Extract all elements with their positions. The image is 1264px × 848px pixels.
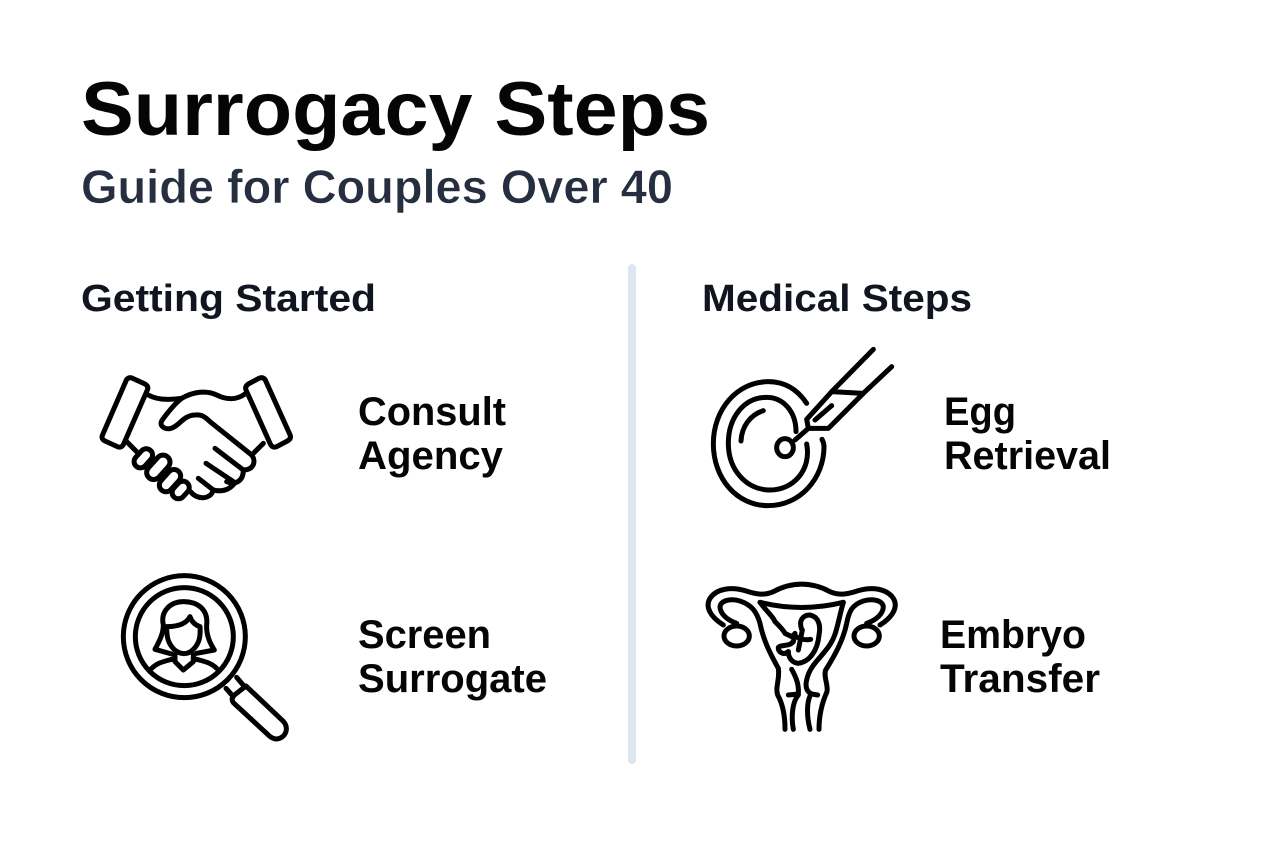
label: egg retrieval: Retrieval (944, 434, 1111, 478)
title: Surrogacy Steps (81, 67, 710, 152)
heading: medical steps: Medical Steps (702, 278, 972, 320)
panel: getting started (81, 278, 547, 739)
label: screen surrogate: Surrogate (358, 657, 547, 701)
label: egg retrieval: Egg (944, 390, 1016, 434)
icon: handshake (102, 378, 290, 501)
label: consult agency (358, 390, 506, 478)
label: embryo transfer: Transfer (940, 657, 1100, 701)
icon: uterus with embryo (708, 584, 895, 729)
label: embryo transfer (940, 613, 1100, 701)
label: egg retrieval (944, 390, 1111, 478)
heading: getting started: Getting Started (81, 278, 376, 320)
label: consult agency: Consult (358, 390, 506, 434)
subtitle: Guide for Couples Over 40 (81, 160, 673, 213)
label: screen surrogate (358, 613, 547, 701)
label: screen surrogate: Screen (358, 613, 491, 657)
icon: magnifier with woman (123, 576, 286, 739)
icon: egg retrieval (713, 349, 892, 506)
label: consult agency: Agency (358, 434, 504, 478)
divider (628, 264, 636, 764)
panel: medical steps (702, 278, 1111, 729)
label: embryo transfer: Embryo (940, 613, 1086, 657)
